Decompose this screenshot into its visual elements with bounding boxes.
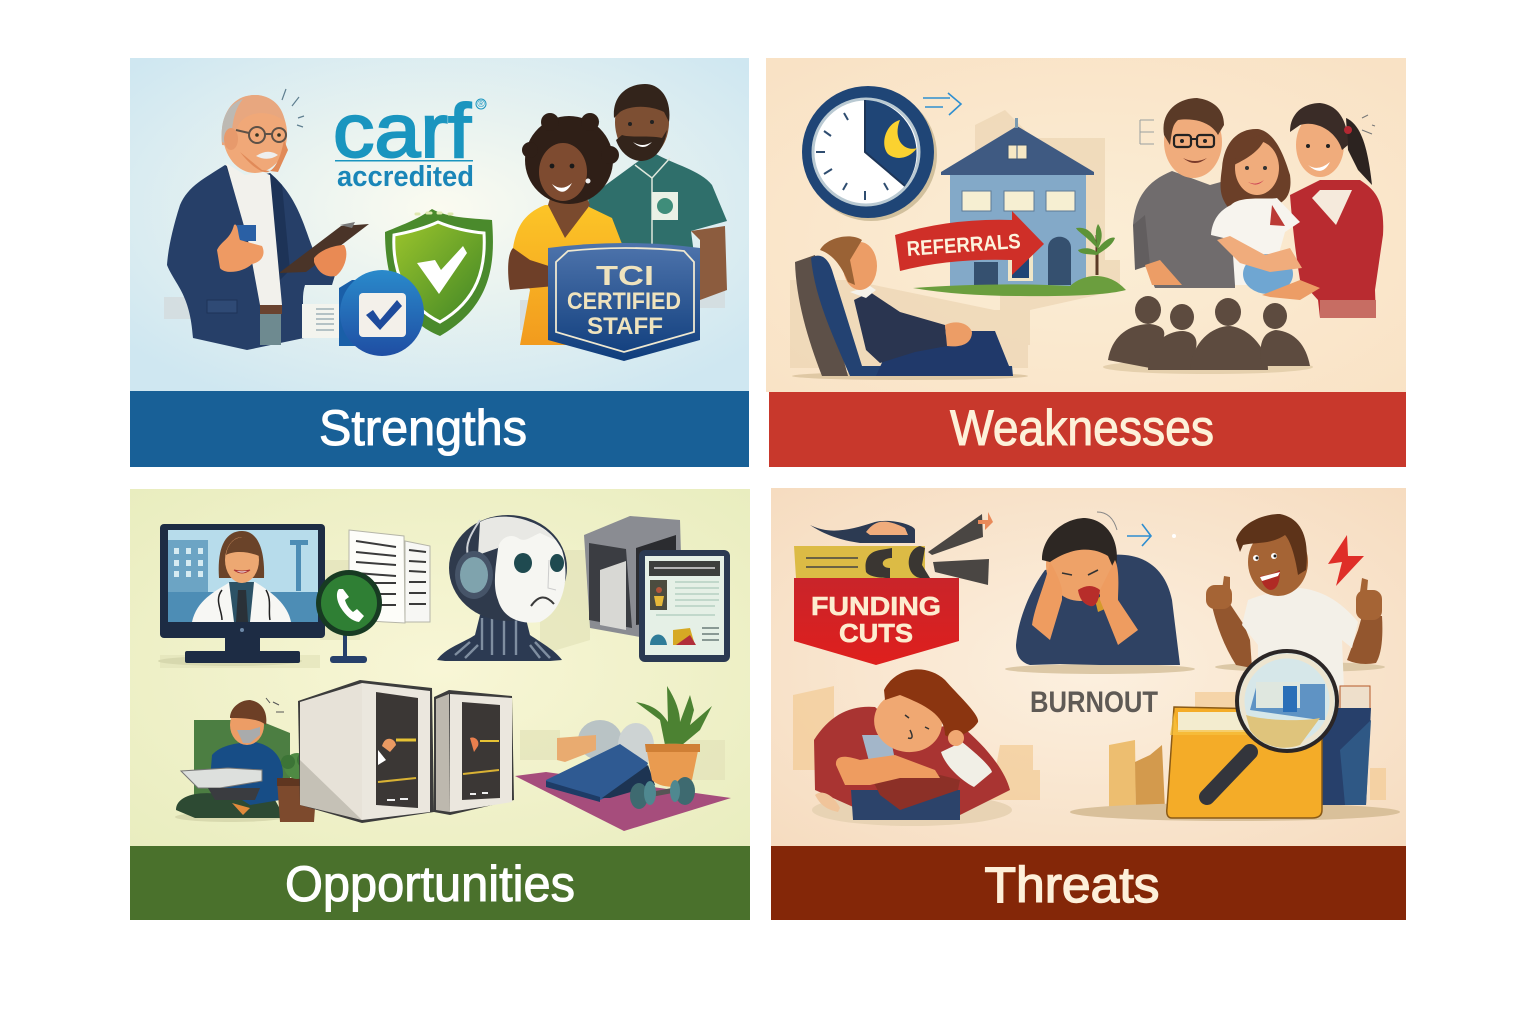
carf accredited logo: carf bbox=[333, 89, 472, 174]
panel: weaknesses bbox=[766, 58, 1406, 467]
banner: weaknesses bbox=[769, 392, 1406, 467]
banner: threats bbox=[771, 846, 1406, 920]
icon: storage cabinets bbox=[298, 680, 514, 823]
icon: clock with moon bbox=[802, 86, 937, 221]
icon: cardboard box bbox=[1109, 740, 1165, 810]
carf accredited logo bbox=[333, 89, 486, 193]
arrow: referrals bbox=[895, 211, 1044, 275]
figure: mother in red bbox=[1290, 103, 1383, 318]
icon: house bbox=[941, 118, 1094, 286]
icon: binder bbox=[546, 744, 655, 802]
banner: funding cuts: CUTS bbox=[839, 618, 913, 648]
group silhouette bbox=[1103, 296, 1313, 374]
figure: daughter bbox=[1211, 129, 1320, 300]
label: burnout: BURNOUT bbox=[1030, 686, 1158, 719]
icon: small potted plant bbox=[277, 752, 318, 822]
icon: telehealth monitor with doctor bbox=[158, 524, 325, 666]
icon: funding cuts scissors and book bbox=[794, 512, 993, 585]
icon: yellow folder bbox=[1167, 707, 1322, 818]
icon: yoga mat bbox=[515, 772, 731, 831]
figure: woman in yellow shirt bbox=[508, 113, 622, 345]
figure: stressed man holding head bbox=[1005, 512, 1195, 674]
arrow: referrals: REFERRALS bbox=[906, 230, 1021, 261]
banner: opportunities: Opportunities bbox=[285, 856, 575, 912]
figure: man thumbs up bbox=[1206, 514, 1385, 690]
banner: opportunities bbox=[130, 846, 750, 920]
icon: documents bbox=[349, 530, 430, 623]
panel: threats bbox=[771, 488, 1406, 920]
shadow shapes bbox=[160, 550, 725, 780]
form sheet bbox=[302, 304, 348, 338]
icon: blue arrow bbox=[1127, 524, 1176, 546]
carf accredited logo: ® bbox=[477, 99, 485, 110]
icon: arrows right bbox=[923, 93, 961, 115]
banner: funding cuts: FUNDING bbox=[811, 591, 941, 621]
badge: TCI certified staff: STAFF bbox=[587, 313, 663, 340]
carf accredited logo: accredited bbox=[337, 161, 474, 193]
icon: phone call circle bbox=[316, 570, 382, 663]
banner: strengths bbox=[130, 391, 749, 467]
figure: executive man with clipboard bbox=[167, 89, 369, 350]
icon: foam rolls bbox=[557, 720, 654, 767]
figure: man reclining in chair bbox=[792, 236, 1028, 380]
panel: opportunities bbox=[130, 489, 750, 920]
icon: magnifying glass bbox=[1207, 651, 1337, 797]
figure: man in teal shirt bbox=[586, 84, 727, 300]
icon: tablet bbox=[639, 550, 730, 662]
icon: server cabinet bbox=[584, 516, 683, 637]
badge: TCI certified staff: TCI bbox=[596, 260, 654, 291]
banner: strengths: Strengths bbox=[319, 400, 527, 456]
badge: TCI certified staff bbox=[548, 243, 700, 361]
shadow shapes bbox=[164, 290, 725, 330]
icon: lightning bolt bbox=[1328, 535, 1364, 586]
figure: father with glasses bbox=[1133, 98, 1235, 288]
background shapes bbox=[793, 686, 1386, 800]
icon: navy folder and book bbox=[1070, 686, 1400, 821]
icon: robot head bbox=[437, 515, 567, 661]
figure: person with mask and laptop bbox=[175, 698, 290, 822]
icon: lawn and tree bbox=[913, 224, 1126, 296]
banner: weaknesses: Weaknesses bbox=[950, 400, 1214, 456]
icon: green shield check bbox=[385, 209, 493, 336]
panel: strengths bbox=[130, 58, 749, 467]
icon: blue circle checkbox bbox=[339, 270, 424, 356]
figure: boy slumped over desk bbox=[812, 669, 1012, 826]
background shadows bbox=[790, 110, 1120, 368]
icon: large potted plant bbox=[636, 686, 712, 787]
banner: threats: Threats bbox=[984, 857, 1160, 913]
banner: funding cuts bbox=[794, 578, 959, 665]
badge: TCI certified staff: CERTIFIED bbox=[567, 288, 681, 315]
icon: dumbbell bbox=[630, 777, 695, 809]
